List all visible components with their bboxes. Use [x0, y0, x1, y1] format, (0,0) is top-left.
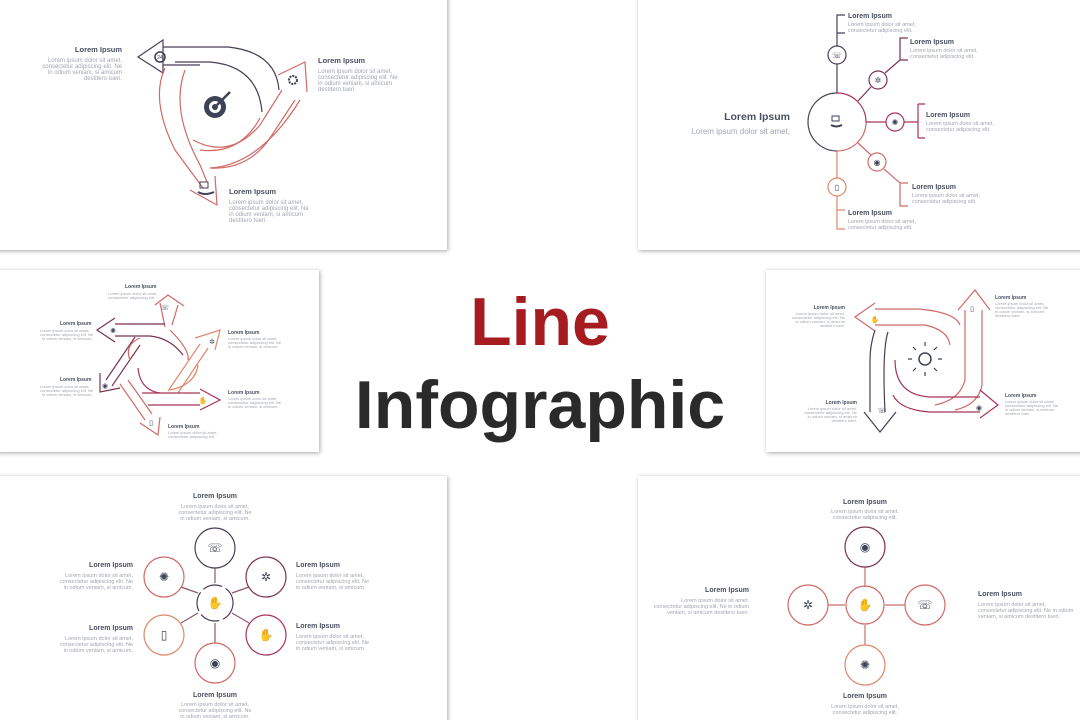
text: bottom: [229, 187, 309, 224]
icon: center clock: [908, 342, 942, 376]
branch: bottom: [828, 151, 846, 229]
arrow: right: [138, 368, 220, 410]
text: bottom: Lorem ipsum dolor sit amet,: [229, 200, 303, 206]
texts: Lorem ipsum dolor sit amet,: [108, 291, 157, 296]
branch texts: Lorem ipsum dolor sit amet,: [910, 48, 978, 54]
panel: bottom-right cross circles slide: consectetur adipiscing elit.: [833, 710, 898, 716]
panel: top-left curved arrows slide: [0, 0, 447, 250]
panel: bottom-right cross circles slide: Lorem Ipsum: [843, 499, 887, 506]
branch: upper-right: [858, 38, 908, 101]
text: bottom: consectetur adipiscing elit. Ne: [229, 206, 309, 212]
icons: ▯: [149, 420, 153, 427]
arrow: left: [97, 318, 183, 355]
panel: middle-right four arrows slide: destitero tueri.: [995, 313, 1020, 318]
arrow: left: [855, 303, 960, 345]
arrow: down-left: [100, 337, 140, 392]
texts: in odium veniam, si amicum.: [42, 392, 92, 397]
texts: Lorem Ipsum: [125, 284, 157, 290]
panel: bottom-right cross circles slide: Lorem Ipsum: [705, 587, 749, 594]
text: right: in odium veniam, si amicum: [318, 81, 392, 87]
texts: Lorem Ipsum: [228, 390, 260, 396]
arrow: up: [935, 290, 990, 410]
texts: consectetur adipiscing elit. Ne: [228, 400, 282, 405]
icons: ✺: [110, 327, 116, 335]
branch texts: Lorem Ipsum: [910, 39, 954, 46]
arrow: down: [120, 338, 160, 435]
branch texts: Lorem Ipsum: [848, 210, 892, 217]
panel: bottom-left hexagon circles slide: in odium veniam, si amicum.: [180, 714, 250, 720]
panel: bottom-right cross circles slide: ✋: [858, 598, 872, 612]
branch texts: [848, 13, 994, 231]
texts: Lorem ipsum dolor sit amet,: [40, 384, 89, 389]
panel: bottom-left hexagon circles slide: Lorem Ipsum: [296, 623, 340, 630]
icons in branch circles: ☏: [832, 51, 842, 60]
texts: Lorem ipsum dolor sit amet,: [228, 396, 277, 401]
panel: bottom-right cross circles slide: consectetur adipiscing elit. Ne in odium: [654, 604, 749, 610]
texts: Lorem Ipsum: [60, 321, 92, 327]
panel: bottom-right cross circles slide: Lorem ipsum dolor sit amet,: [681, 598, 749, 604]
branch texts: Lorem ipsum dolor sit amet,: [912, 193, 980, 199]
hub text: Lorem Ipsum: [724, 111, 790, 123]
icons in branch circles: [832, 51, 899, 192]
panel: middle-right four arrows slide: Lorem Ipsum: [826, 400, 858, 406]
panel: bottom-right cross circles slide: Lorem Ipsum: [978, 591, 1022, 598]
text: right: Lorem Ipsum: [318, 56, 365, 65]
text: left: Lorem Ipsum: [75, 45, 122, 54]
panel: middle-right four arrows slide: destitero tueri.: [1005, 411, 1030, 416]
branch texts: Lorem Ipsum: [848, 13, 892, 20]
panel: middle-right four arrows slide: in odium veniam, si amicum: [808, 414, 858, 419]
icons in branch circles: ✺: [892, 118, 899, 127]
icon: 24h: 24: [157, 55, 163, 61]
panel: middle-right four arrows slide: Lorem ipsum dolor sit amet,: [808, 406, 857, 411]
text: left: destitero tueri.: [84, 76, 122, 82]
panel: middle-right four arrows slide: ▯: [970, 306, 974, 313]
icons in branch circles: ✲: [875, 76, 882, 85]
panel: middle-right four arrows slide: consectetur adipiscing elit. Ne: [1005, 403, 1059, 408]
texts: consectetur adipiscing elit. Ne: [40, 332, 94, 337]
panel: middle-right four arrows slide: in odium veniam, si amicum: [796, 319, 846, 324]
panel: bottom-left hexagon circles slide: in odium veniam, si amicum.: [64, 648, 133, 654]
texts: Lorem Ipsum: [60, 377, 92, 383]
panel: middle-left six arrows slide: [0, 270, 319, 452]
panel: top-right hub slide: [638, 0, 1080, 250]
panel: middle-right four arrows slide: Lorem Ipsum: [995, 295, 1027, 301]
panel: bottom-left hexagon circles slide: Lorem ipsum dolor sit amet,: [65, 573, 133, 579]
panel: bottom-right cross circles slide: ✺: [860, 658, 870, 672]
icon: money hand: [198, 182, 214, 194]
branch: right: [866, 104, 925, 138]
panel: middle-right four arrows slide: Lorem Ipsum: [1005, 393, 1037, 399]
panel: bottom-left hexagon circles slide: Lorem Ipsum: [193, 493, 237, 500]
panel: bottom-left hexagon circles slide: Lorem Ipsum: [89, 562, 133, 569]
text: left: Lorem ipsum dolor sit amet,: [48, 58, 122, 64]
title: Line: [470, 284, 610, 360]
icons: ✲: [209, 338, 215, 346]
icon: 24h: [155, 52, 165, 62]
texts: consectetur adipiscing elit. Ne: [228, 340, 282, 345]
panel: bottom-left hexagon circles slide: consectetur adipiscing elit. Ne: [178, 708, 252, 714]
panel: middle-right four arrows slide: in odium veniam, si amicum: [995, 309, 1045, 314]
text: bottom: destitero tueri.: [229, 218, 267, 224]
texts: Lorem ipsum dolor sit amet,: [40, 328, 89, 333]
icons: [102, 304, 215, 427]
panel: bottom-right cross circles slide: Lorem Ipsum: [843, 693, 887, 700]
panel: middle-right four arrows slide: consectetur adipiscing elit. Ne: [804, 410, 858, 415]
panel: bottom-left hexagon circles slide: [0, 476, 447, 720]
text: right: [318, 56, 398, 93]
icons: ◉: [102, 383, 108, 390]
panel: bottom-right cross circles slide: Lorem ipsum dolor sit amet,: [831, 704, 899, 710]
panel: bottom-left hexagon circles slide: consectetur adipiscing elit. Ne: [178, 510, 252, 516]
panel: middle-right four arrows slide: destitero tueri.: [820, 323, 845, 328]
panel: middle-right four arrows slide: destitero tueri.: [832, 418, 857, 423]
panel: bottom-left hexagon circles slide: ✋: [259, 628, 273, 642]
branch texts: consectetur adipiscing elit.: [912, 199, 977, 205]
branch texts: consectetur adipiscing elit.: [926, 127, 991, 133]
panel: bottom-left hexagon circles slide: ◉: [210, 656, 220, 670]
texts: Lorem ipsum dolor sit amet,: [168, 430, 217, 435]
branch texts: Lorem Ipsum: [912, 184, 956, 191]
branch texts: Lorem Ipsum: [926, 112, 970, 119]
panel: middle-right four arrows slide: ✋: [871, 315, 879, 324]
arrow: left dark: [138, 40, 279, 112]
branch texts: Lorem ipsum dolor sit amet,: [848, 22, 916, 28]
panel: bottom-left hexagon circles slide: ✋: [208, 596, 222, 610]
panel: middle-right four arrows slide: [766, 270, 1080, 452]
icons in branch circles: ▯: [835, 183, 839, 192]
panel: bottom-left hexagon circles slide: ✲: [261, 570, 271, 584]
panel: bottom-left hexagon circles slide: consectetur adipiscing elit. Ne: [60, 579, 133, 585]
panel: bottom-left hexagon circles slide: in odium veniam, si amicum.: [64, 585, 133, 591]
panel: bottom-right cross circles slide: consectetur adipiscing elit. Ne in odium: [978, 608, 1074, 614]
panel: middle-right four arrows slide: consectetur adipiscing elit. Ne: [995, 305, 1049, 310]
panel: middle-right four arrows slide: Lorem ipsum dolor sit amet,: [1005, 399, 1054, 404]
text: left: [42, 45, 123, 82]
panel: bottom-left hexagon circles slide: Lorem ipsum dolor sit amet,: [296, 634, 364, 640]
panel: bottom-left hexagon circles slide: consectetur adipiscing elit. Ne: [296, 640, 369, 646]
texts: Lorem ipsum dolor sit amet,: [228, 336, 277, 341]
hub text: [691, 111, 790, 136]
arrow: down: [864, 330, 896, 432]
branch: top: [828, 15, 846, 93]
text: right: consectetur adipiscing elit. Ne: [318, 75, 398, 81]
panel: bottom-right cross circles slide: consectetur adipiscing elit.: [833, 515, 898, 521]
branch texts: Lorem ipsum dolor sit amet,: [848, 219, 916, 225]
texts: consectetur adipiscing elit. Ne: [40, 388, 94, 393]
icon: target center: [204, 92, 230, 118]
arrow: up: [155, 295, 188, 360]
panel: bottom-right cross circles slide: Lorem ipsum dolor sit amet,: [978, 602, 1046, 608]
panel: bottom-right cross circles slide: veniam, si amicum destitero tueri.: [667, 610, 749, 616]
panel: bottom-left hexagon circles slide: in odium veniam, si amicum.: [296, 646, 366, 652]
panel: bottom-left hexagon circles slide: consectetur adipiscing elit. Ne: [60, 642, 133, 648]
texts: in odium veniam, si amicum.: [228, 404, 278, 409]
text: right: destitero tueri.: [318, 87, 356, 93]
arrow: down-left salmon: [159, 68, 300, 205]
panel: middle-right four arrows slide: Lorem ipsum dolor sit amet,: [796, 311, 845, 316]
panel: bottom-left hexagon circles slide: consectetur adipiscing elit. Ne: [296, 579, 369, 585]
texts: [40, 284, 282, 439]
panel: middle-right four arrows slide: consectetur adipiscing elit. Ne: [792, 315, 846, 320]
panel: middle-right four arrows slide: ◉: [976, 405, 982, 412]
panel: middle-right four arrows slide: ☏: [878, 407, 887, 415]
panel: bottom-right cross circles slide: ◉: [860, 540, 870, 554]
panel: bottom-left hexagon circles slide: Lorem ipsum dolor sit amet,: [181, 702, 249, 708]
hub circle: [808, 93, 866, 151]
panel: bottom-left hexagon circles slide: Lorem ipsum dolor sit amet,: [65, 636, 133, 642]
text: left: in odium veniam, si amicum: [48, 70, 122, 76]
panel: bottom-right cross circles slide: ✲: [803, 598, 813, 612]
texts: consectetur adipiscing elit.: [108, 295, 155, 300]
icon: gear: [289, 76, 297, 84]
panel: middle-right four arrows slide: in odium veniam, si amicum: [1005, 407, 1055, 412]
panel: middle-right four arrows slide: Lorem ipsum dolor sit amet,: [995, 301, 1044, 306]
panel: bottom-left hexagon circles slide: in odium veniam, si amicum.: [180, 516, 250, 522]
arrow: right: [893, 360, 998, 418]
panel: bottom-right cross circles slide: ☏: [917, 598, 933, 612]
panel: bottom-left hexagon circles slide: Lorem Ipsum: [296, 562, 340, 569]
title: [355, 284, 725, 443]
panel: bottom-left hexagon circles slide: ☏: [207, 541, 223, 555]
title: Infographic: [355, 367, 725, 443]
branch texts: consectetur adipiscing elit.: [848, 225, 913, 231]
panel: bottom-left hexagon circles slide: Lorem ipsum dolor sit amet,: [296, 573, 364, 579]
branch texts: consectetur adipiscing elit.: [910, 54, 975, 60]
panel: bottom-left hexagon circles slide: in odium veniam, si amicum.: [296, 585, 366, 591]
texts: Lorem Ipsum: [228, 330, 260, 336]
texts: in odium veniam, si amicum.: [228, 344, 278, 349]
panel: middle-right four arrows slide: Lorem Ipsum: [814, 305, 846, 311]
panel: bottom-right cross circles slide: Lorem ipsum dolor sit amet,: [831, 509, 899, 515]
text: right: Lorem ipsum dolor sit amet,: [318, 69, 392, 75]
panel: bottom-left hexagon circles slide: Lorem Ipsum: [193, 692, 237, 699]
text: bottom: Lorem Ipsum: [229, 187, 276, 196]
panel: bottom-left hexagon circles slide: Lorem Ipsum: [89, 625, 133, 632]
texts: in odium veniam, si amicum.: [42, 336, 92, 341]
arrow: upper-right: [168, 330, 220, 393]
branch texts: consectetur adipiscing elit.: [848, 28, 913, 34]
panel: bottom-left hexagon circles slide: ▯: [161, 628, 167, 642]
icons in branch circles: ◉: [874, 158, 881, 167]
panel: bottom-left hexagon circles slide: Lorem ipsum dolor sit amet,: [181, 504, 249, 510]
icon: hub money: [831, 116, 842, 126]
hub text: Lorem ipsum dolor sit amet,: [691, 127, 790, 136]
panel: bottom-right cross circles slide: [638, 476, 1080, 720]
texts: Lorem Ipsum: [168, 424, 200, 430]
text: bottom: in odium veniam, si amicum: [229, 212, 303, 218]
panel: bottom-left hexagon circles slide: ✺: [159, 570, 169, 584]
icons: ☏: [161, 304, 170, 312]
panel: bottom-right cross circles slide: veniam, si amicum destitero tueri.: [978, 614, 1060, 620]
texts: consectetur adipiscing elit.: [168, 434, 215, 439]
branch texts: Lorem ipsum dolor sit amet,: [926, 121, 994, 127]
icons: ✋: [199, 396, 207, 405]
text: left: consectetur adipiscing elit. Ne: [42, 64, 123, 70]
branch: lower-right: [858, 143, 908, 206]
arrow: up-right salmon: [193, 62, 307, 168]
